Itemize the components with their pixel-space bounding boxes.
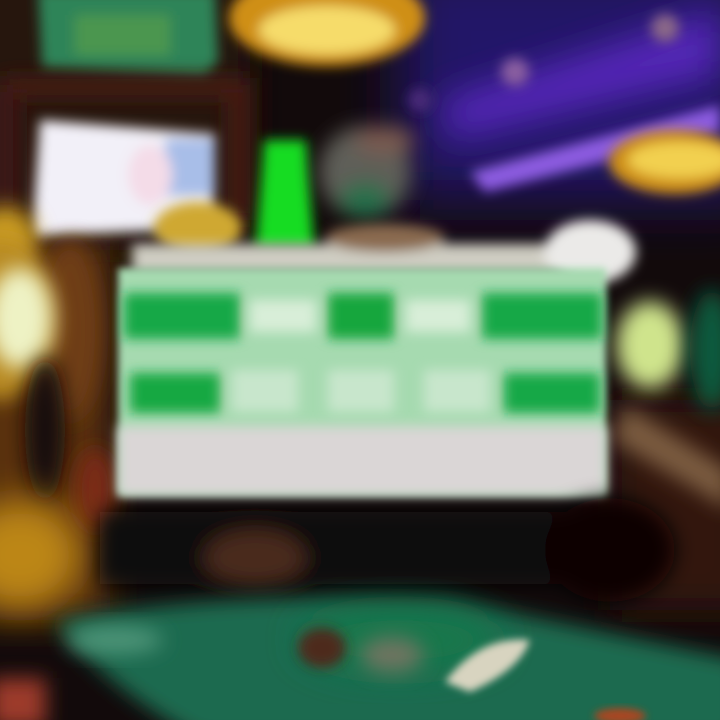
row 3	[118, 426, 606, 496]
lower dark band	[100, 498, 675, 602]
screen: white display	[32, 120, 215, 236]
table panel	[118, 268, 606, 496]
lamp glow: under display	[154, 202, 242, 254]
right lights	[612, 290, 720, 510]
green felt table	[55, 598, 720, 720]
row 2	[130, 370, 600, 413]
ceiling: purple light streaks	[408, 10, 720, 192]
grey round object	[319, 126, 415, 218]
wooden frame	[0, 78, 250, 220]
top of table glow	[132, 220, 636, 284]
lamp: right	[609, 130, 720, 194]
lamp: top centre	[229, 0, 425, 66]
screen: green monitor top left	[38, 0, 218, 76]
bright green bar	[256, 140, 314, 248]
row 1	[124, 293, 602, 339]
left lights	[0, 206, 115, 720]
